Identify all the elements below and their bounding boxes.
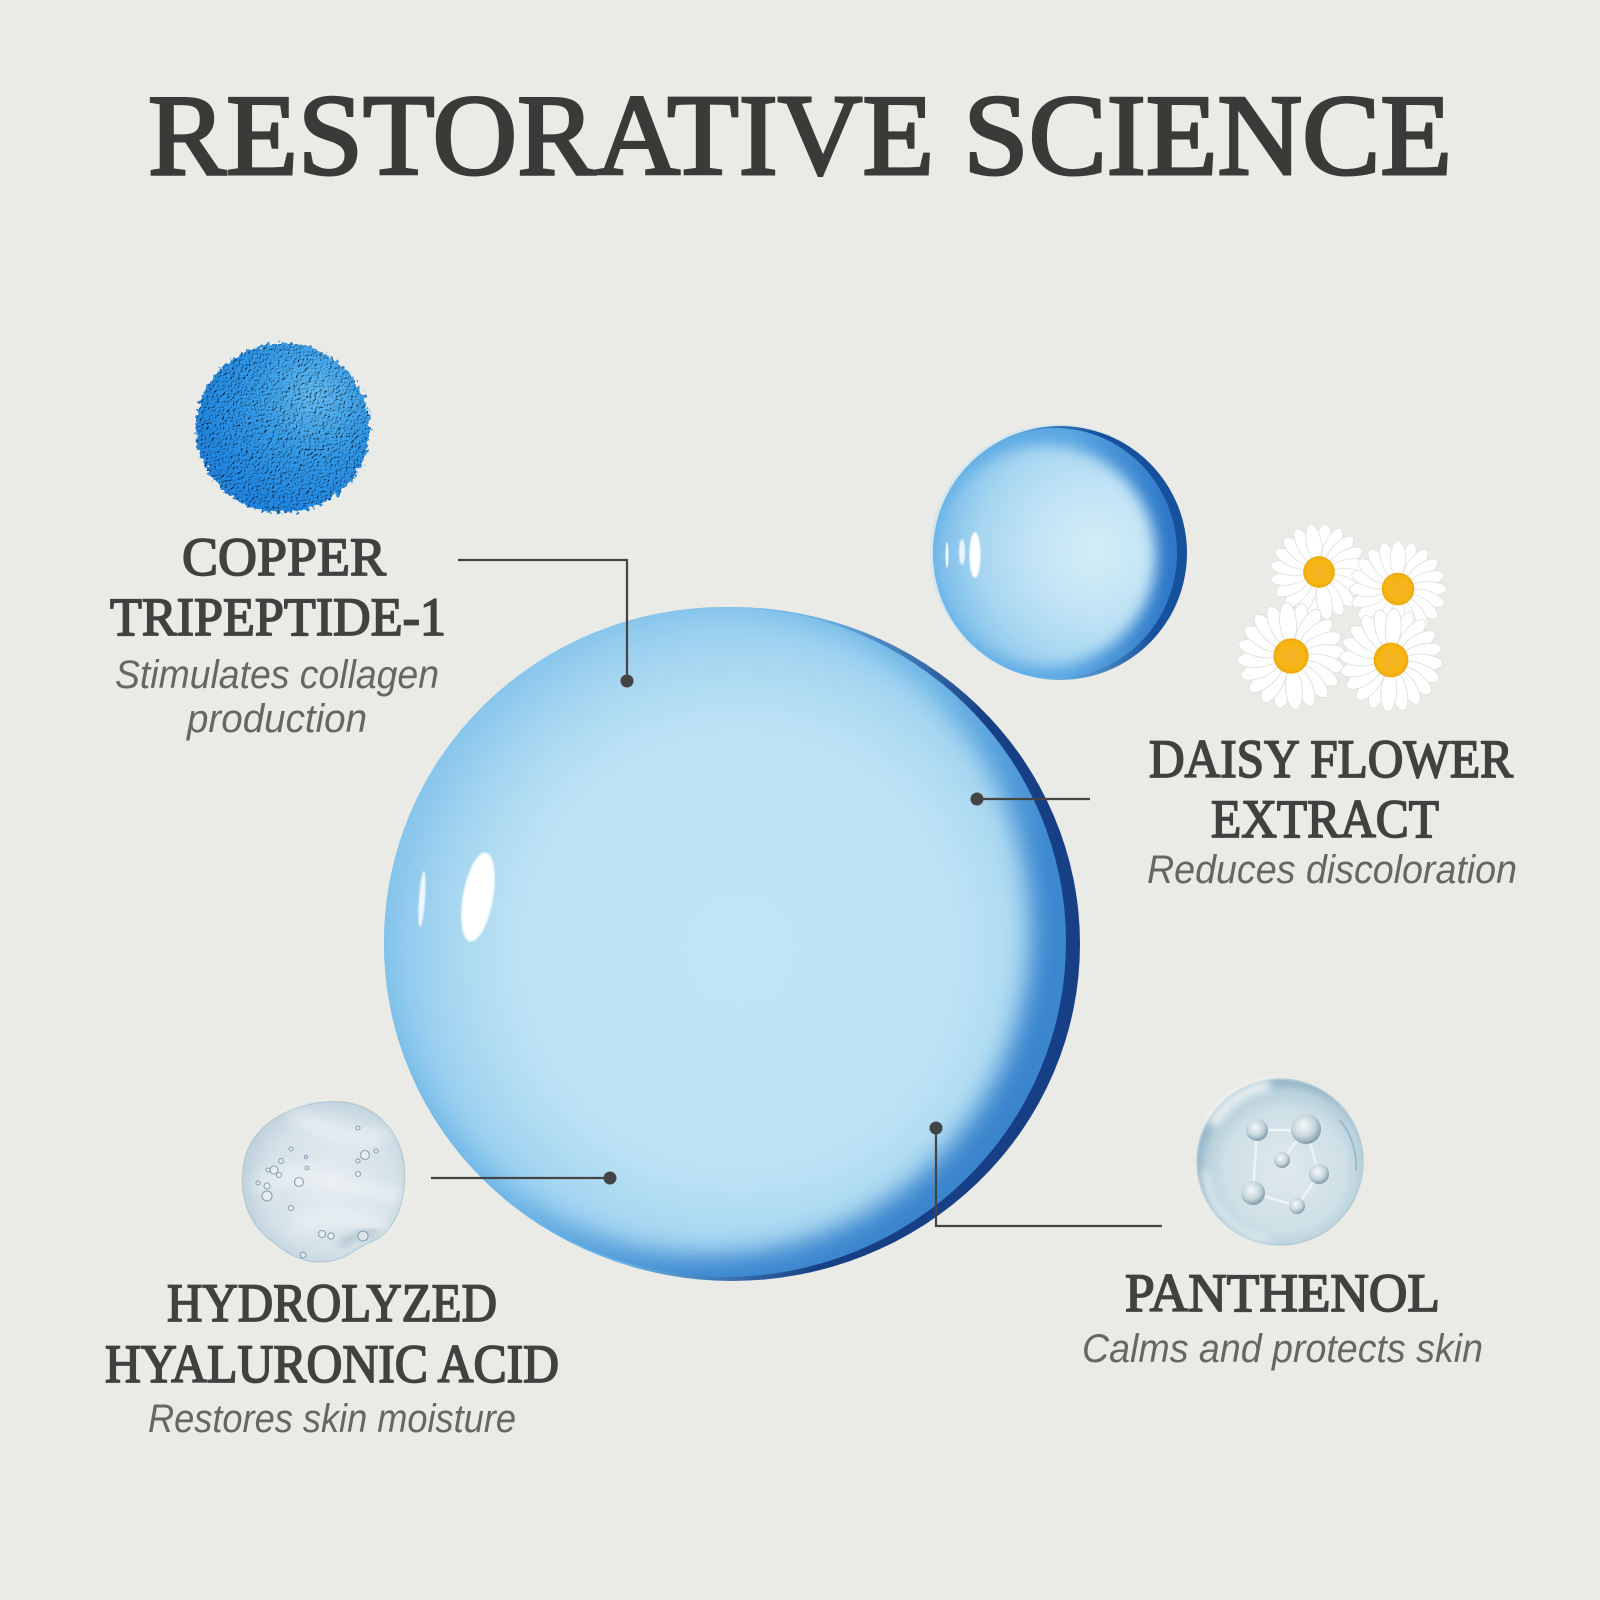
heading: daisy flower extract: EXTRACT	[1211, 789, 1439, 849]
main serum drop	[384, 605, 1080, 1281]
flower: top right	[1341, 532, 1455, 646]
heading: hydrolyzed hyaluronic acid	[105, 1273, 559, 1394]
description: daisy flower extract: Reduces discoloration	[1147, 848, 1517, 892]
description: copper tripeptide-1	[115, 653, 439, 741]
flower: top left	[1270, 523, 1368, 621]
small serum drop	[930, 424, 1187, 680]
leader line: hydrolyzed hyaluronic acid	[431, 1172, 616, 1184]
panel: panthenol	[930, 1079, 1483, 1371]
icon: blue powder	[196, 343, 370, 513]
flower: bottom left	[1232, 597, 1350, 715]
highlight on main drop	[417, 850, 501, 944]
title: RESTORATIVE SCIENCE	[148, 72, 1452, 199]
description: copper tripeptide-1: production	[186, 697, 367, 741]
heading: copper tripeptide-1	[110, 527, 446, 647]
heading: copper tripeptide-1: TRIPEPTIDE-1	[110, 587, 446, 647]
description: hydrolyzed hyaluronic acid: Restores skin moisture	[148, 1397, 516, 1441]
flower: bottom right	[1328, 597, 1454, 723]
heading: hydrolyzed hyaluronic acid: HYALURONIC ACID	[105, 1334, 559, 1394]
icon: molecule droplet	[1197, 1079, 1363, 1245]
description: panthenol: Calms and protects skin	[1082, 1327, 1483, 1371]
description: copper tripeptide-1: Stimulates collagen	[115, 653, 439, 697]
bubbles	[256, 1126, 378, 1258]
leader line: copper tripeptide-1	[458, 560, 634, 688]
heading: hydrolyzed hyaluronic acid: HYDROLYZED	[167, 1273, 497, 1333]
heading: daisy flower extract: DAISY FLOWER	[1149, 729, 1513, 789]
panel: daisy flower extract	[970, 523, 1517, 892]
leader line: panthenol	[930, 1122, 1162, 1226]
icon: gel blob	[242, 1102, 405, 1262]
heading: panthenol: PANTHENOL	[1125, 1263, 1440, 1323]
heading: daisy flower extract	[1149, 729, 1513, 849]
panel: copper tripeptide-1	[110, 343, 634, 741]
heading: copper tripeptide-1: COPPER	[182, 527, 386, 587]
icon: daisies	[1232, 523, 1455, 723]
leader line: daisy flower extract	[970, 792, 1090, 806]
highlight on small drop	[945, 532, 980, 578]
panel: hydrolyzed hyaluronic acid	[105, 1102, 616, 1441]
